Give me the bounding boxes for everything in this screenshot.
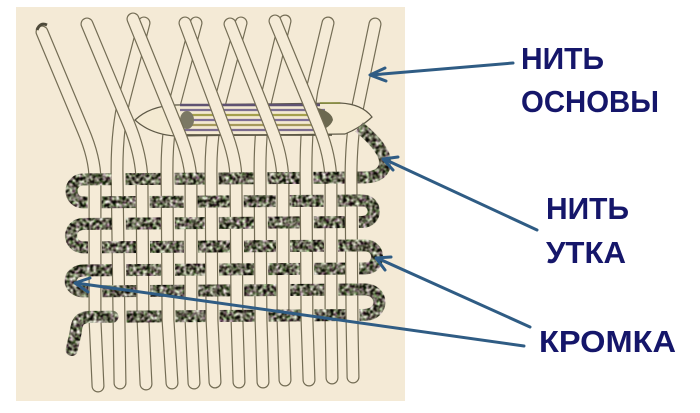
arrow: warp thread [370, 63, 513, 81]
label: warp thread: ОСНОВЫ [521, 84, 659, 119]
weft row 7 [126, 315, 345, 317]
arrow: weft thread [383, 157, 537, 230]
weft row 2 [102, 201, 324, 202]
label: selvedge: КРОМКА [539, 324, 676, 359]
selvedge turns left [70, 179, 112, 292]
label: weft thread [546, 191, 629, 270]
selvedge turns right [338, 200, 379, 315]
label: warp thread: НИТЬ [521, 41, 604, 76]
panel: paper background [16, 7, 405, 401]
label: warp thread [521, 41, 659, 119]
weft row 4 [102, 246, 324, 247]
weft row 5 [126, 269, 345, 270]
warp threads: left-leaning group [117, 21, 375, 383]
arrow: selvedge lower [75, 278, 524, 346]
warp threads: right-leaning group [37, 19, 332, 386]
label: weft thread: НИТЬ [546, 191, 629, 226]
label: weft thread: УТКА [546, 235, 626, 270]
weft thread woven through warp [70, 127, 386, 350]
arrow: selvedge upper [376, 257, 530, 327]
weft row 3 [126, 222, 345, 224]
weft row 6 [102, 290, 324, 291]
weft row 1 with tail to shuttle [125, 127, 385, 179]
weft loose end [71, 317, 113, 350]
shuttle [135, 103, 372, 136]
